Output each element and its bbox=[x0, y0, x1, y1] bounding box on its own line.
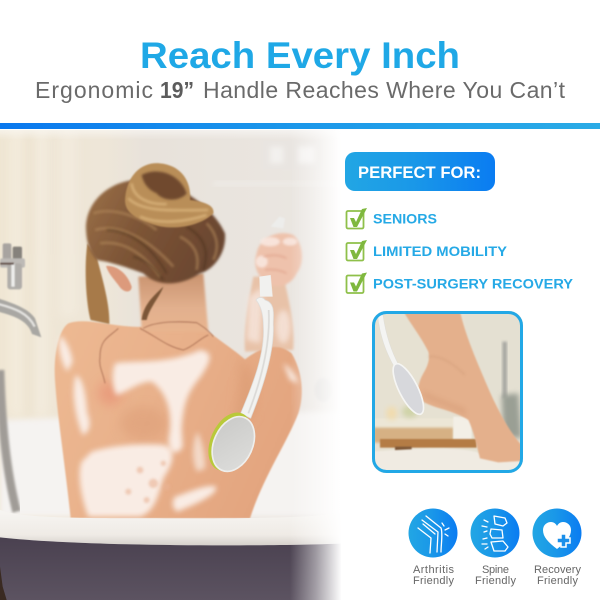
wall tap bbox=[315, 378, 332, 402]
back shading and blush bbox=[98, 372, 252, 436]
icon labels: Arthritis bbox=[413, 564, 454, 576]
item: seniors bbox=[346, 208, 437, 228]
leg and heel bbox=[403, 311, 522, 462]
inset photo: foot with brush bbox=[372, 311, 525, 475]
brush head bbox=[208, 412, 248, 470]
header divider bar bbox=[0, 123, 600, 129]
ear bbox=[106, 266, 132, 291]
icon labels bbox=[413, 564, 582, 587]
neck bbox=[138, 273, 208, 332]
photo: woman in bathtub using long-handled brush bbox=[0, 129, 347, 600]
item: limited mobility bbox=[346, 240, 507, 260]
item: limited mobility: LIMITED MOBILITY bbox=[373, 244, 507, 259]
badge: perfect for bbox=[345, 152, 495, 191]
icon labels: Spine bbox=[482, 564, 509, 576]
subtitle bbox=[35, 77, 566, 103]
icon: arthritis friendly knee bbox=[408, 508, 458, 558]
title: Reach Every Inch bbox=[140, 35, 460, 76]
item: post-surgery recovery bbox=[346, 272, 573, 293]
subtitle: Ergonomic bbox=[35, 77, 153, 103]
checklist bbox=[346, 208, 573, 293]
bathtub interior bbox=[0, 412, 347, 517]
icon labels: Friendly bbox=[475, 575, 516, 587]
bathtub rim and body bbox=[0, 510, 347, 600]
white fade at top of photo bbox=[0, 130, 315, 136]
wall and curtain background bbox=[0, 130, 347, 530]
wet hair strands on back bbox=[100, 322, 213, 383]
faucet bbox=[0, 243, 41, 512]
torso bbox=[55, 321, 302, 518]
icon labels: Recovery bbox=[534, 564, 582, 576]
item: seniors: SENIORS bbox=[373, 212, 437, 226]
icon labels: Friendly bbox=[413, 575, 454, 587]
icon: recovery friendly heart bbox=[532, 508, 582, 558]
forearm and hand bbox=[245, 233, 302, 352]
brush bbox=[378, 315, 398, 367]
icon labels: Friendly bbox=[537, 575, 578, 587]
hair bbox=[86, 180, 225, 324]
soap foam bbox=[59, 335, 298, 517]
long-handled brush bbox=[208, 218, 284, 472]
icon: spine friendly vertebrae bbox=[470, 508, 520, 558]
badge: perfect for: PERFECT FOR: bbox=[358, 163, 481, 182]
hair bun bbox=[125, 163, 213, 227]
white mask right of photo bbox=[341, 130, 600, 600]
shower hose bbox=[0, 370, 17, 512]
subtitle: 19” bbox=[160, 77, 194, 103]
subtitle: Handle Reaches Where You Can’t bbox=[203, 77, 566, 103]
white fade on right of photo bbox=[290, 129, 342, 600]
item: post-surgery recovery: POST-SURGERY RECOVERY bbox=[373, 276, 573, 292]
